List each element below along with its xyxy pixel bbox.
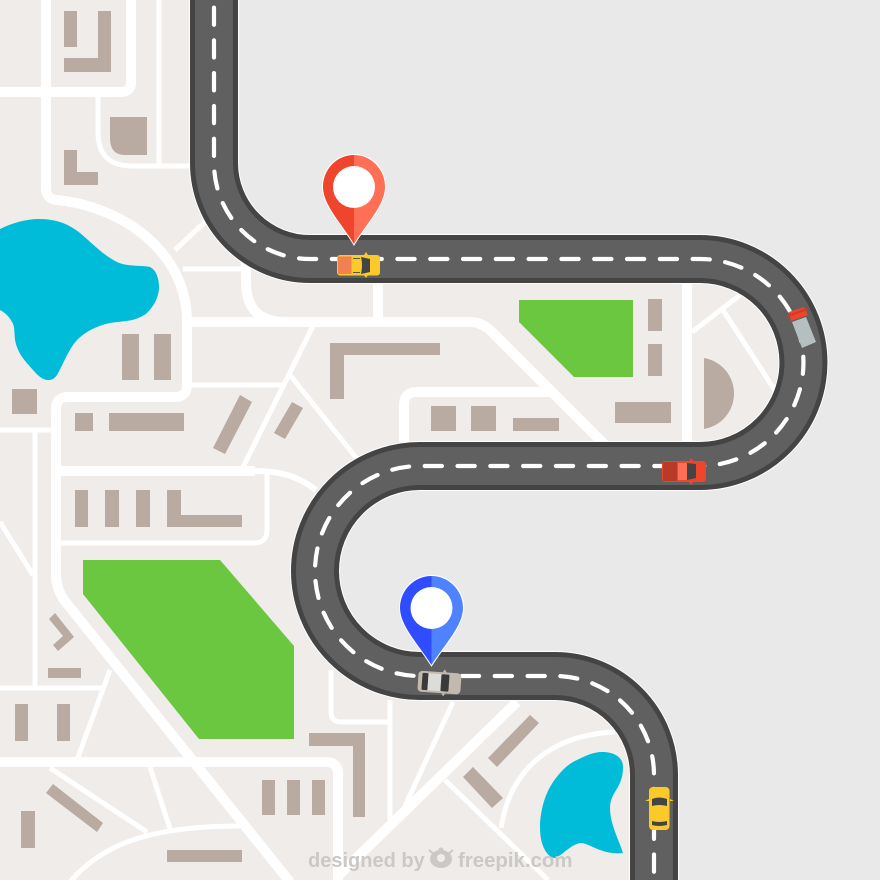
freepik watermark: designed by [308, 850, 426, 872]
blue location pin [400, 576, 463, 665]
silver car on lower road [417, 668, 462, 698]
red location pin [323, 155, 385, 244]
grey truck on the bend [787, 307, 816, 348]
lake right [540, 752, 623, 858]
green park top right [519, 300, 633, 377]
buildings [12, 11, 734, 862]
winding road [214, 0, 803, 880]
freepik watermark: freepik.com [458, 850, 572, 872]
red car on middle road [662, 458, 706, 485]
green park bottom left [83, 560, 294, 739]
yellow taxi on bottom road [645, 787, 674, 830]
lake left [0, 219, 159, 380]
freepik watermark [308, 848, 572, 872]
icon: freepik logo [429, 848, 453, 868]
grey area beyond the road [214, 0, 880, 880]
yellow taxi on top road [337, 252, 380, 278]
